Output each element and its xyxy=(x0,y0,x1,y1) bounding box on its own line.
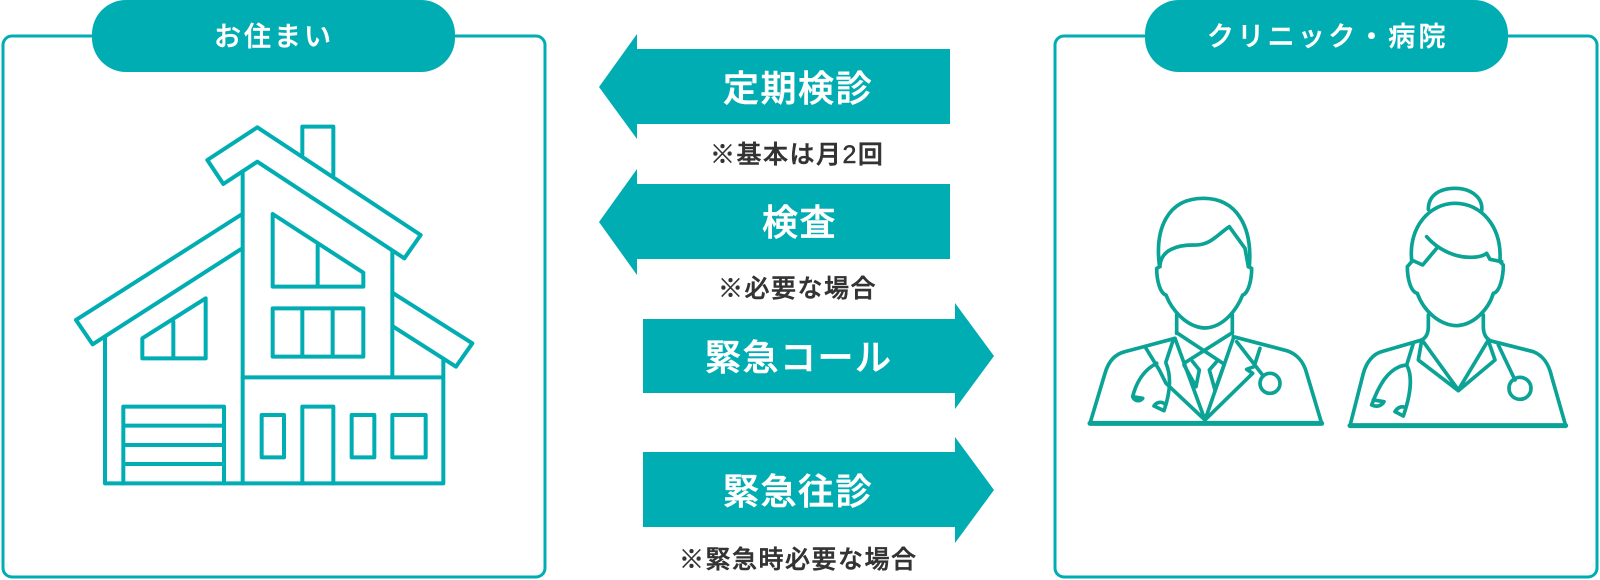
arrow: regular visit: 定期検診 xyxy=(723,68,873,109)
arrow: examination xyxy=(599,169,950,275)
icon: female doctor xyxy=(1350,188,1566,426)
arrow: regular visit xyxy=(599,34,950,139)
heading: clinic: クリニック・病院 xyxy=(1207,22,1449,52)
icon: house xyxy=(76,127,472,483)
arrow: emergency home visit: 緊急往診 xyxy=(723,471,873,512)
heading: clinic xyxy=(1145,0,1508,72)
heading: home: お住まい xyxy=(214,22,334,52)
arrow: emergency call xyxy=(643,303,994,409)
panel: home xyxy=(3,0,545,577)
icon: male doctor xyxy=(1090,198,1322,423)
note: twice a month: ※基本は月2回 xyxy=(710,141,884,169)
arrow: examination: 検査 xyxy=(762,202,837,243)
panel: clinic xyxy=(1055,0,1597,577)
arrow: emergency home visit xyxy=(643,437,994,543)
arrow: emergency call: 緊急コール xyxy=(705,337,893,378)
note: if needed in emergency: ※緊急時必要な場合 xyxy=(679,546,918,574)
heading: home xyxy=(92,0,455,72)
note: if needed: ※必要な場合 xyxy=(718,275,877,303)
